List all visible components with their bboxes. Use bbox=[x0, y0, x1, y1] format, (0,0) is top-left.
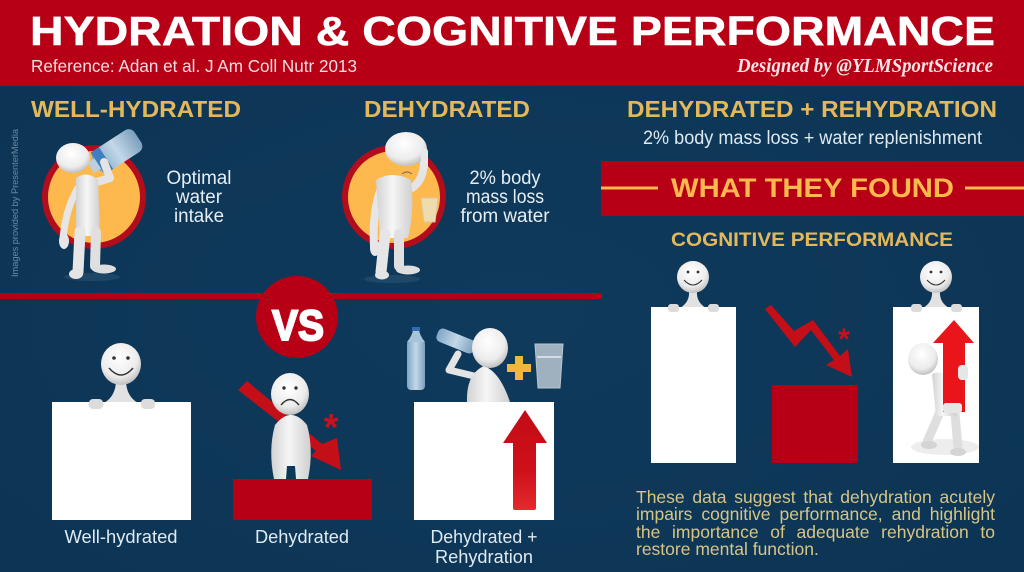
bar: well-hydrated bbox=[651, 307, 736, 463]
bar: dehydrated + rehydration bbox=[414, 402, 554, 520]
text: conclusion paragraph: the importance of adequate rehydration to bbox=[636, 522, 995, 542]
bar: dehydrated + rehydration bbox=[893, 307, 979, 463]
text: conclusion paragraph: restore mental function. bbox=[636, 539, 819, 559]
banner: what they found: WHAT THEY FOUND bbox=[671, 173, 954, 203]
figure: person carrying up arrow bbox=[908, 320, 979, 456]
text: optimal water intake: Optimal bbox=[166, 168, 232, 189]
text: 2% body mass loss from water: 2% body bbox=[470, 168, 541, 189]
figure: smiling figure above bar bbox=[101, 343, 141, 403]
text: optimal water intake bbox=[166, 168, 232, 227]
text: optimal water intake: water bbox=[175, 187, 223, 208]
subheading: rehydration definition: 2% body mass loss + water replenishment bbox=[643, 127, 983, 149]
label: dehydrated + rehydration: Rehydration bbox=[435, 547, 533, 567]
label: dehydrated + rehydration: Dehydrated + bbox=[430, 527, 538, 547]
heading: dehydrated + rehydration: DEHYDRATED + REHYDRATION bbox=[627, 96, 997, 122]
icon: well-hydrated figure drinking bbox=[45, 126, 145, 281]
heading: cognitive performance: COGNITIVE PERFORMANCE bbox=[671, 229, 953, 251]
header banner bbox=[0, 0, 1024, 86]
heading: well-hydrated: WELL-HYDRATED bbox=[31, 96, 241, 122]
icon: water bottle bbox=[407, 327, 425, 390]
asterisk: significance: * bbox=[838, 323, 850, 356]
text: 2% body mass loss from water bbox=[460, 168, 550, 227]
figure: smiling figure on third bar bbox=[920, 261, 952, 308]
bar chart: right comparison bbox=[651, 261, 979, 463]
hands over bar edge bbox=[89, 399, 155, 409]
label: well-hydrated: Well-hydrated bbox=[64, 527, 178, 547]
asterisk: significance: * bbox=[324, 407, 339, 449]
figure: smiling figure on first bar bbox=[677, 261, 709, 308]
text: optimal water intake: intake bbox=[174, 206, 224, 227]
figure: drinking figure on bar bbox=[435, 327, 510, 402]
bar: dehydrated bbox=[233, 479, 372, 520]
arrow: zigzag down bbox=[765, 305, 852, 377]
text: conclusion paragraph bbox=[636, 486, 995, 559]
icon: plus sign bbox=[507, 356, 531, 380]
title: HYDRATION & COGNITIVE PERFORMANCE bbox=[30, 8, 995, 54]
reference citation: Reference: Adan et al. J Am Coll Nutr 2013 bbox=[31, 56, 357, 76]
designer credit: Designed by @YLMSportScience bbox=[736, 55, 993, 77]
bar: dehydrated bbox=[772, 385, 858, 463]
VS label: VS bbox=[272, 302, 324, 350]
text: conclusion paragraph: These data suggest that dehydration acutely bbox=[636, 486, 995, 506]
banner: what they found bbox=[601, 161, 1024, 216]
image credit: Images provided by PresenterMedia bbox=[10, 128, 21, 277]
hands on first bar bbox=[668, 304, 719, 312]
icon: dehydrated figure holding head bbox=[345, 132, 443, 283]
figure: sad figure on bar bbox=[271, 373, 311, 479]
text: conclusion paragraph: impairs cognitive performance, and highlight bbox=[636, 504, 995, 524]
arrow: down arrow behind sad figure bbox=[238, 381, 341, 470]
arrow: up in white bar bbox=[503, 410, 547, 510]
heading: dehydrated: DEHYDRATED bbox=[364, 96, 530, 122]
bar chart: left comparison bbox=[52, 327, 563, 567]
hands on third bar bbox=[911, 304, 962, 312]
label: dehydrated: Dehydrated bbox=[255, 527, 349, 547]
label: dehydrated + rehydration bbox=[430, 527, 538, 567]
icon: water glass bbox=[535, 344, 563, 388]
bar: well-hydrated bbox=[52, 402, 191, 520]
divider with VS badge bbox=[0, 276, 602, 358]
text: 2% body mass loss from water: mass loss bbox=[466, 187, 544, 208]
text: 2% body mass loss from water: from water bbox=[460, 206, 550, 227]
